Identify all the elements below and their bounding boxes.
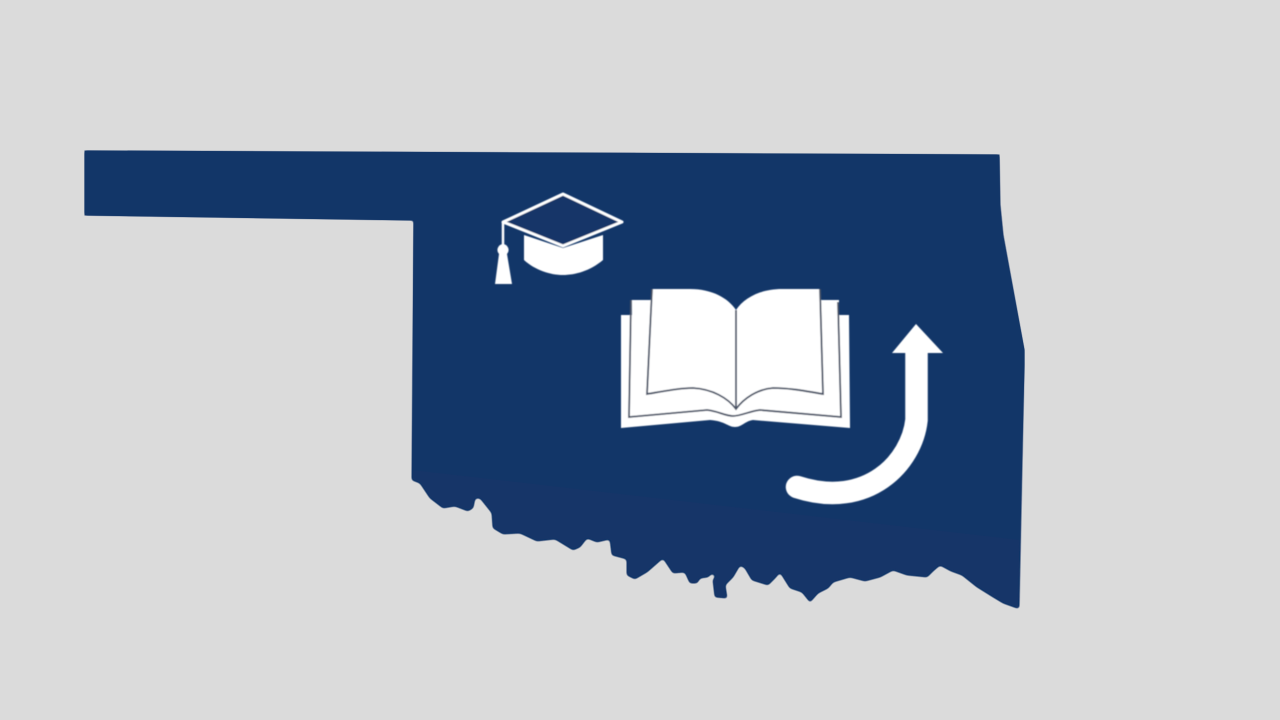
arrow: curved upward arrow: [797, 324, 943, 493]
book spine: [735, 310, 737, 409]
icon: open book: [621, 289, 850, 428]
tassel: [495, 244, 512, 284]
arrow shaft: [797, 350, 916, 493]
second page outline: [629, 300, 841, 417]
tassel cord: [502, 222, 504, 246]
back pages: [621, 289, 850, 428]
cap base: [524, 235, 603, 275]
page outlines: [647, 289, 823, 409]
arrow head: [892, 324, 943, 353]
icon: graduation cap: [495, 194, 622, 284]
cap board: [503, 194, 622, 246]
map: state of Oklahoma silhouette: [84, 150, 1024, 608]
